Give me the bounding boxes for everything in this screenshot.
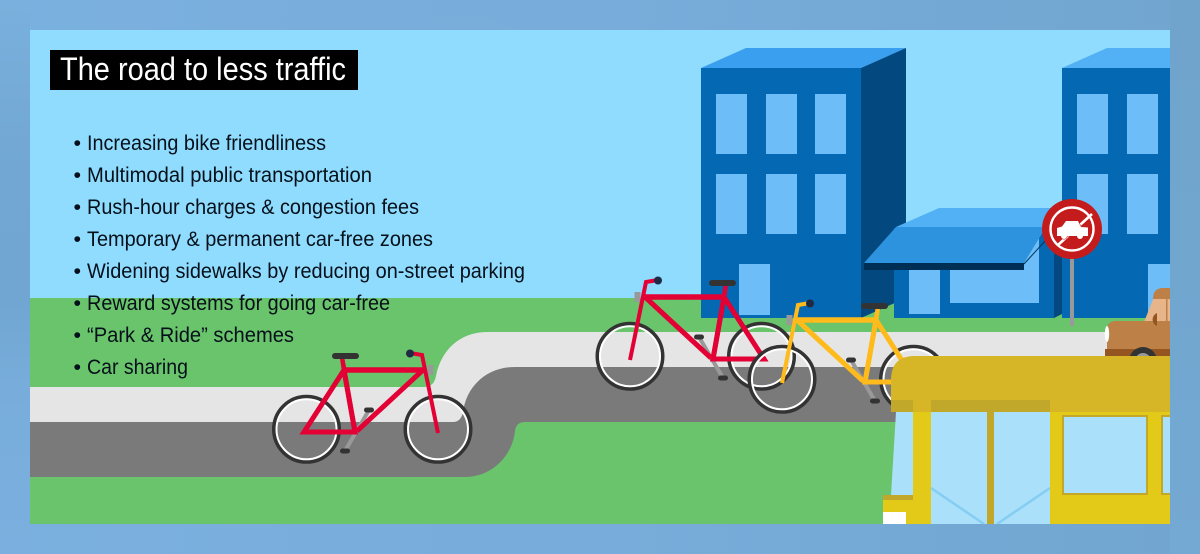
building: right tower — [1062, 48, 1170, 318]
car — [1104, 288, 1170, 356]
bullet list — [74, 131, 525, 379]
bicycle: red, foreground — [274, 350, 471, 462]
grass — [30, 298, 1170, 524]
item: widening sidewalks: • — [74, 259, 81, 283]
item: park and ride: • — [74, 323, 81, 347]
item: charges and fees: Rush-hour charges & congestion fees — [87, 195, 419, 219]
building: left tower — [701, 48, 906, 318]
sky — [30, 30, 1170, 300]
bicycle: yellow — [749, 300, 946, 412]
no-cars sign — [1042, 199, 1102, 326]
item: car-free zones: Temporary & permanent car-free zones — [87, 227, 433, 251]
item: park and ride: “Park & Ride” schemes — [87, 323, 294, 347]
item: bike friendliness: • — [74, 131, 81, 155]
building: low pavilion with awning — [864, 208, 1062, 318]
item: public transportation: • — [74, 163, 81, 187]
item: car sharing: Car sharing — [87, 355, 188, 379]
bus — [883, 356, 1182, 524]
item: car-free zones: • — [74, 227, 81, 251]
item: car sharing: • — [74, 355, 81, 379]
bicycle: red, background — [597, 276, 794, 389]
title: The road to less traffic — [60, 51, 346, 87]
road — [30, 367, 896, 477]
sidewalk — [30, 332, 1170, 422]
item: reward systems: • — [74, 291, 81, 315]
item: reward systems: Reward systems for going car-free — [87, 291, 390, 315]
item: public transportation: Multimodal public transportation — [87, 163, 372, 187]
item: charges and fees: • — [74, 195, 81, 219]
item: widening sidewalks: Widening sidewalks by reducing on-street parking — [87, 259, 525, 283]
item: bike friendliness: Increasing bike friendliness — [87, 131, 326, 155]
